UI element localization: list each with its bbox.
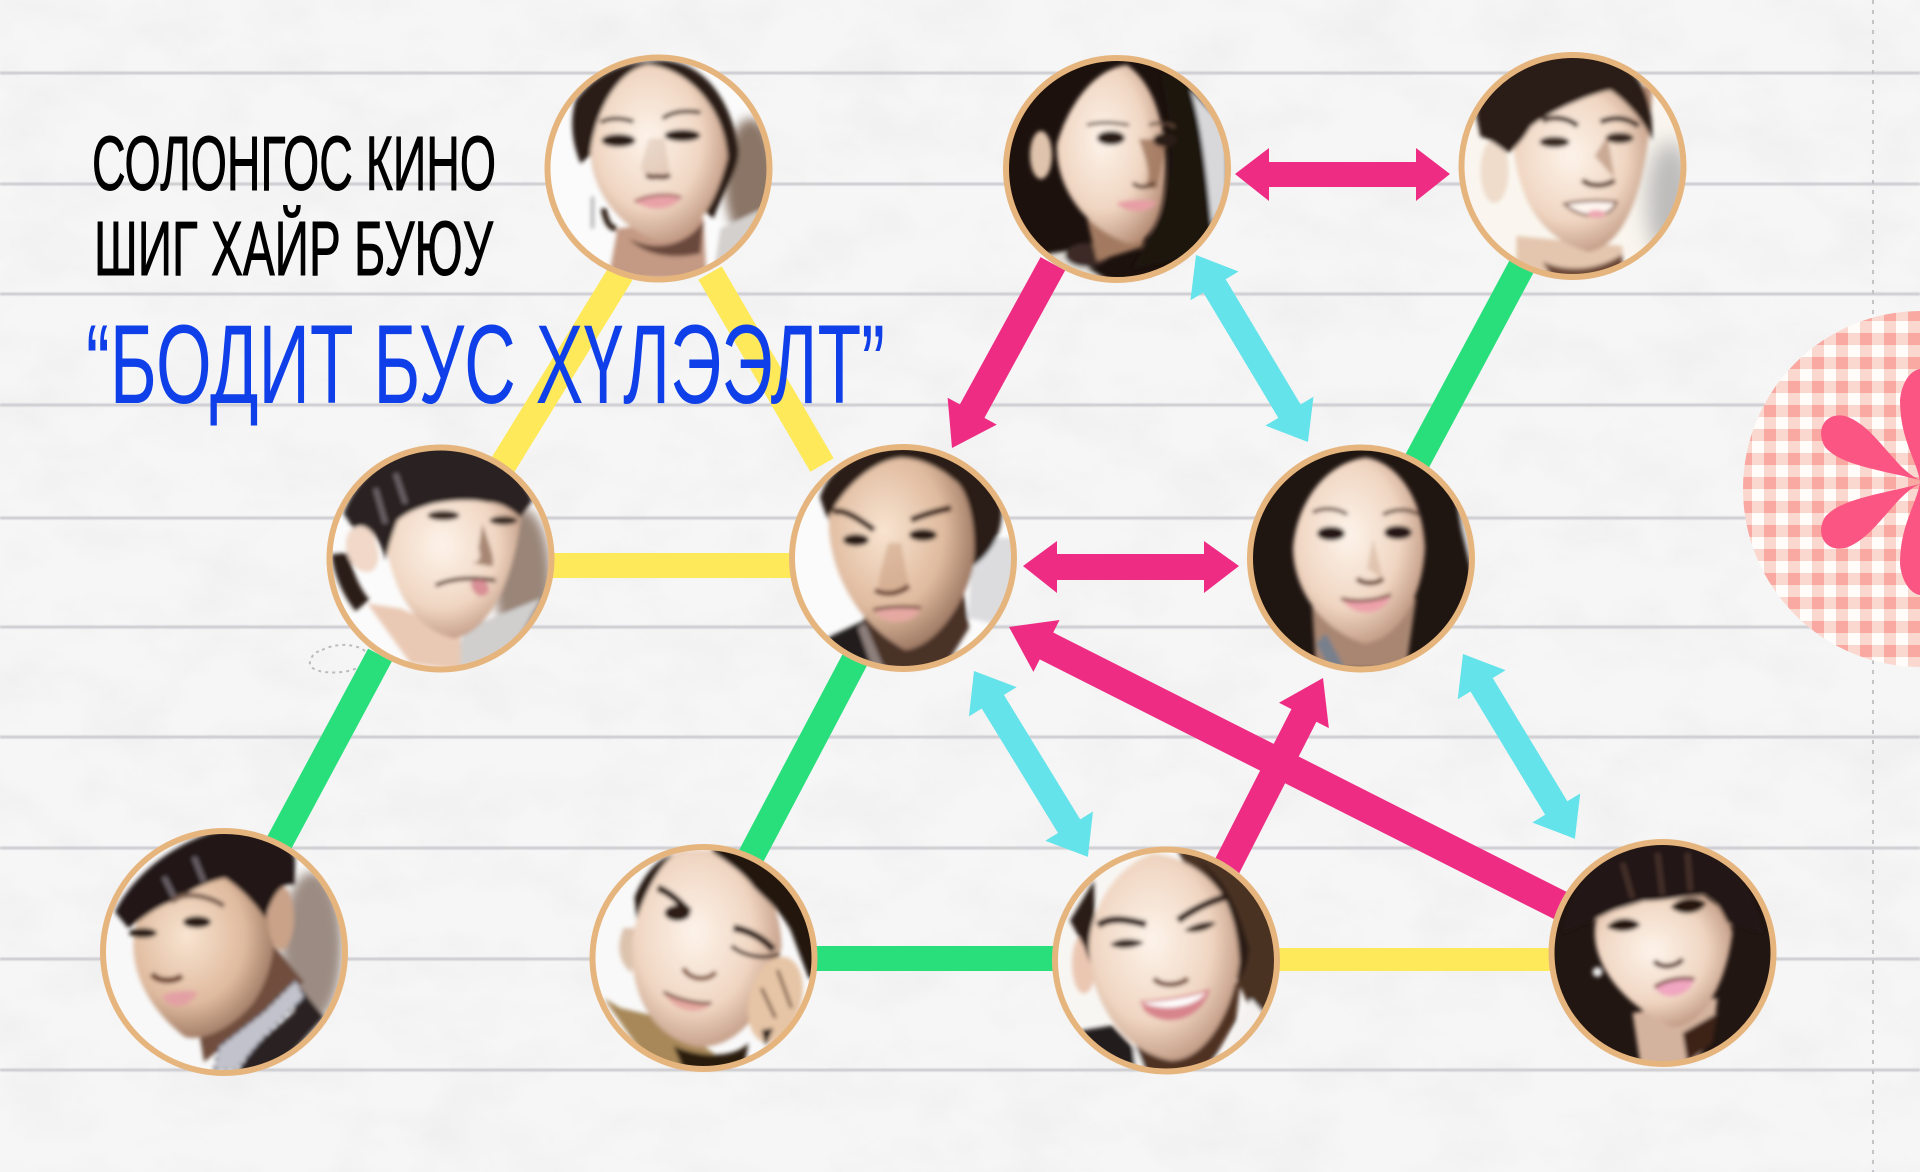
portrait: top woman xyxy=(548,58,776,280)
portrait ring xyxy=(1250,448,1472,670)
portrait: top right man xyxy=(1462,52,1694,278)
yellow link: top woman to centre man xyxy=(710,273,822,465)
portrait: centre man xyxy=(792,446,1015,670)
green link: left man to bottom-left man xyxy=(278,655,380,845)
portrait: left man xyxy=(330,444,552,670)
portrait: bottom right woman xyxy=(1552,841,1774,1065)
icon: pink flower xyxy=(1821,369,1920,595)
arrow: pink long to centre man xyxy=(996,601,1575,932)
portrait: centre right woman xyxy=(1250,448,1473,670)
portrait: bottom left man xyxy=(103,830,345,1077)
arrow: pink up to centre-right woman xyxy=(1198,665,1348,887)
arrow: pink double middle xyxy=(1023,541,1239,593)
title line 1: СОЛОНГОС КИНО xyxy=(92,121,496,207)
portrait ring xyxy=(1462,55,1684,277)
arrow: pink double top xyxy=(1235,148,1450,201)
title line 3: blue highlight: “БОДИТ БУС ХҮЛЭЭЛТ” xyxy=(86,302,885,427)
portrait: bottom centre man winking xyxy=(592,844,818,1070)
green link: centre man to bottom man xyxy=(748,650,860,862)
portrait ring xyxy=(1552,842,1774,1064)
arrow: cyan double lower right xyxy=(1439,639,1599,853)
yellow link: left man to centre man xyxy=(540,553,800,578)
portrait ring xyxy=(792,447,1014,669)
portrait ring xyxy=(592,847,814,1069)
arrow: cyan double lower left xyxy=(950,656,1112,872)
portrait ring xyxy=(1055,850,1277,1072)
portrait ring xyxy=(1006,58,1228,280)
portrait: bottom smiling man xyxy=(1055,846,1280,1076)
portrait: top centre woman xyxy=(1006,58,1228,283)
yellow link: top woman to left man xyxy=(501,273,621,468)
portrait ring xyxy=(548,58,770,280)
connector lines xyxy=(278,260,1570,960)
green link: bottom man to winking-smile man xyxy=(800,946,1070,971)
portrait ring xyxy=(103,831,345,1073)
title line 2: ШИГ ХАЙР БУЮУ xyxy=(94,205,494,292)
arrow: pink single to centre man xyxy=(927,250,1077,461)
arrow: cyan double upper xyxy=(1172,241,1332,456)
arrows xyxy=(927,148,1599,932)
decorative gingham circle with pink flower xyxy=(1743,311,1920,667)
title xyxy=(86,121,885,427)
yellow link: smile man to bottom-right woman xyxy=(1260,948,1570,971)
green link: top-right man to centre-right woman xyxy=(1415,260,1525,465)
portrait ring xyxy=(330,448,552,670)
